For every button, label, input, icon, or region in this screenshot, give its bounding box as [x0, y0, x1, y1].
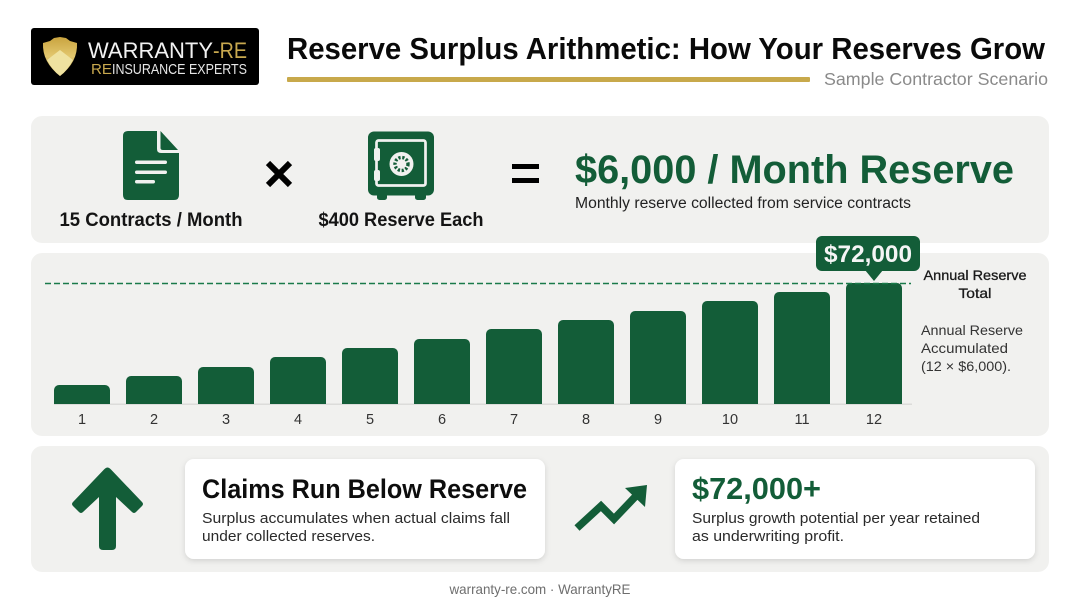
month axis labels	[78, 412, 882, 428]
card: claims run below reserve: Surplus accumulates when actual claims fall	[202, 510, 510, 527]
panel: cumulative bar chart	[31, 236, 1049, 436]
dashed annual total line	[45, 282, 911, 284]
headline: monthly reserve: $6,000 / Month Reserve	[575, 148, 1014, 192]
icon: up arrow	[72, 468, 143, 550]
month axis labels: 7	[510, 412, 518, 428]
callout: $72,000	[816, 236, 920, 281]
baseline	[54, 404, 912, 405]
callout: $72,000: $72,000	[824, 241, 912, 268]
bars	[54, 283, 902, 404]
icon: equals sign	[512, 164, 539, 183]
month axis labels: 4	[294, 412, 302, 428]
icon: trending up arrow	[577, 485, 647, 528]
note: annual reserve accumulated: Annual Reserve	[921, 322, 1023, 338]
card: surplus growth: as underwriting profit.	[692, 528, 844, 545]
month axis labels: 11	[794, 412, 810, 428]
logo	[31, 28, 259, 85]
label: contracts per month: 15 Contracts / Month	[60, 210, 242, 231]
note: annual reserve accumulated: (12 × $6,000).	[921, 358, 1011, 374]
subtitle: Sample Contractor Scenario	[824, 69, 1048, 89]
month axis labels: 1	[78, 412, 86, 428]
footer: warranty-re.com · WarrantyRE	[449, 581, 630, 597]
icon: multiply sign	[268, 163, 290, 185]
month axis labels: 8	[582, 412, 590, 428]
month axis labels: 12	[866, 412, 882, 428]
label: annual reserve total: Annual Reserve	[924, 267, 1027, 283]
month axis labels: 10	[722, 412, 738, 428]
month axis labels: 2	[150, 412, 158, 428]
note: annual reserve accumulated: Accumulated	[921, 340, 1008, 356]
logo tagline: RE	[91, 61, 112, 78]
month axis labels: 6	[438, 412, 446, 428]
card: claims run below reserve	[185, 459, 545, 559]
card: surplus growth	[675, 459, 1035, 559]
title: Reserve Surplus Arithmetic: How Your Reserves Grow	[287, 31, 1046, 66]
label: annual reserve total	[924, 267, 1027, 301]
panel: monthly reserve formula	[31, 116, 1049, 243]
note: annual reserve accumulated	[921, 322, 1023, 374]
month axis labels: 3	[222, 412, 230, 428]
month axis labels: 9	[654, 412, 662, 428]
title underline	[287, 77, 810, 82]
label: reserve each: $400 Reserve Each	[318, 210, 484, 231]
icon: gold shield	[43, 37, 77, 76]
card: surplus growth: $72,000+	[692, 471, 821, 506]
panel: outcomes	[31, 446, 1049, 572]
logo wordmark: -RE	[213, 38, 247, 63]
caption: monthly reserve: Monthly reserve collected from service contracts	[575, 195, 911, 212]
month axis labels: 5	[366, 412, 374, 428]
card: claims run below reserve: Claims Run Below Reserve	[202, 474, 527, 504]
logo tagline: INSURANCE EXPERTS	[112, 61, 247, 78]
card: claims run below reserve: under collected reserves.	[202, 528, 375, 545]
icon: contract document	[123, 131, 179, 200]
label: annual reserve total: Total	[958, 285, 992, 301]
card: surplus growth: Surplus growth potential per year retained	[692, 510, 980, 527]
logo wordmark: WARRANTY	[88, 38, 213, 63]
icon: safe	[368, 132, 434, 200]
